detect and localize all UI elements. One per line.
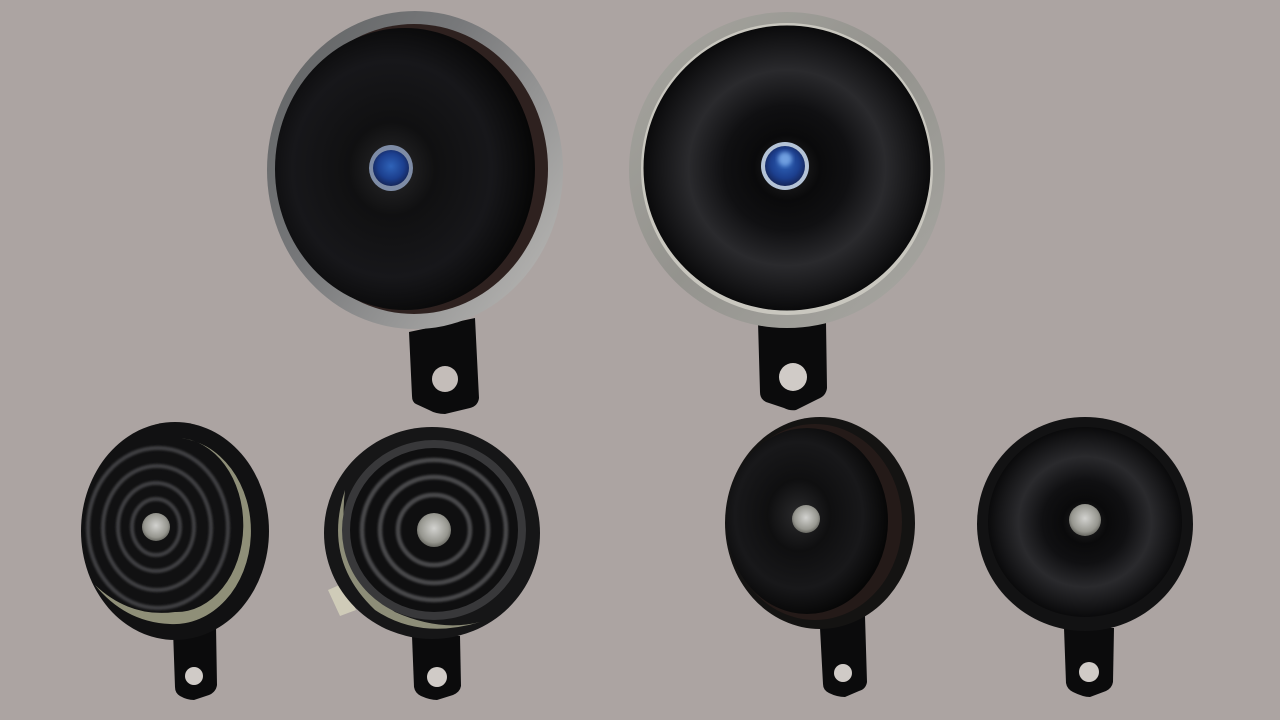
mounting hole — [427, 667, 447, 687]
bracket — [758, 322, 827, 410]
centre bolt — [142, 513, 170, 541]
outer body — [977, 417, 1193, 631]
outer body — [81, 422, 269, 640]
dome — [988, 427, 1182, 617]
outer body — [725, 417, 915, 629]
bracket — [409, 318, 479, 414]
dome — [644, 26, 930, 310]
bracket — [1064, 628, 1114, 697]
mounting hole — [779, 363, 807, 391]
centre bolt — [417, 513, 451, 547]
bracket — [173, 626, 217, 700]
mounting hole — [432, 366, 458, 392]
blue centre cap — [761, 142, 809, 190]
bracket — [412, 636, 461, 700]
bracket — [820, 616, 867, 697]
horn 3: ribbed, bottom far left — [81, 422, 269, 700]
metal rim — [267, 11, 563, 329]
mounting hole — [834, 664, 852, 682]
centre bolt — [792, 505, 820, 533]
white connector — [328, 583, 356, 616]
dome — [275, 28, 535, 310]
mounting hole — [185, 667, 203, 685]
horn 2: large, top right — [629, 12, 945, 410]
pale seal ring — [95, 438, 251, 624]
blue centre cap — [369, 145, 413, 191]
ribs — [88, 448, 228, 608]
metal rim — [629, 12, 945, 328]
ribs — [362, 460, 506, 600]
horn 6: smooth, bottom far right — [977, 417, 1193, 697]
outer body — [324, 427, 540, 639]
horn 4: ribbed, bottom centre left — [324, 427, 540, 700]
dome — [726, 428, 888, 614]
centre bolt — [1069, 504, 1101, 536]
pale seal ring — [338, 490, 480, 629]
horn 5: smooth, bottom centre right — [725, 417, 915, 697]
mounting hole — [1079, 662, 1099, 682]
horn 1: large, top left — [267, 11, 563, 414]
